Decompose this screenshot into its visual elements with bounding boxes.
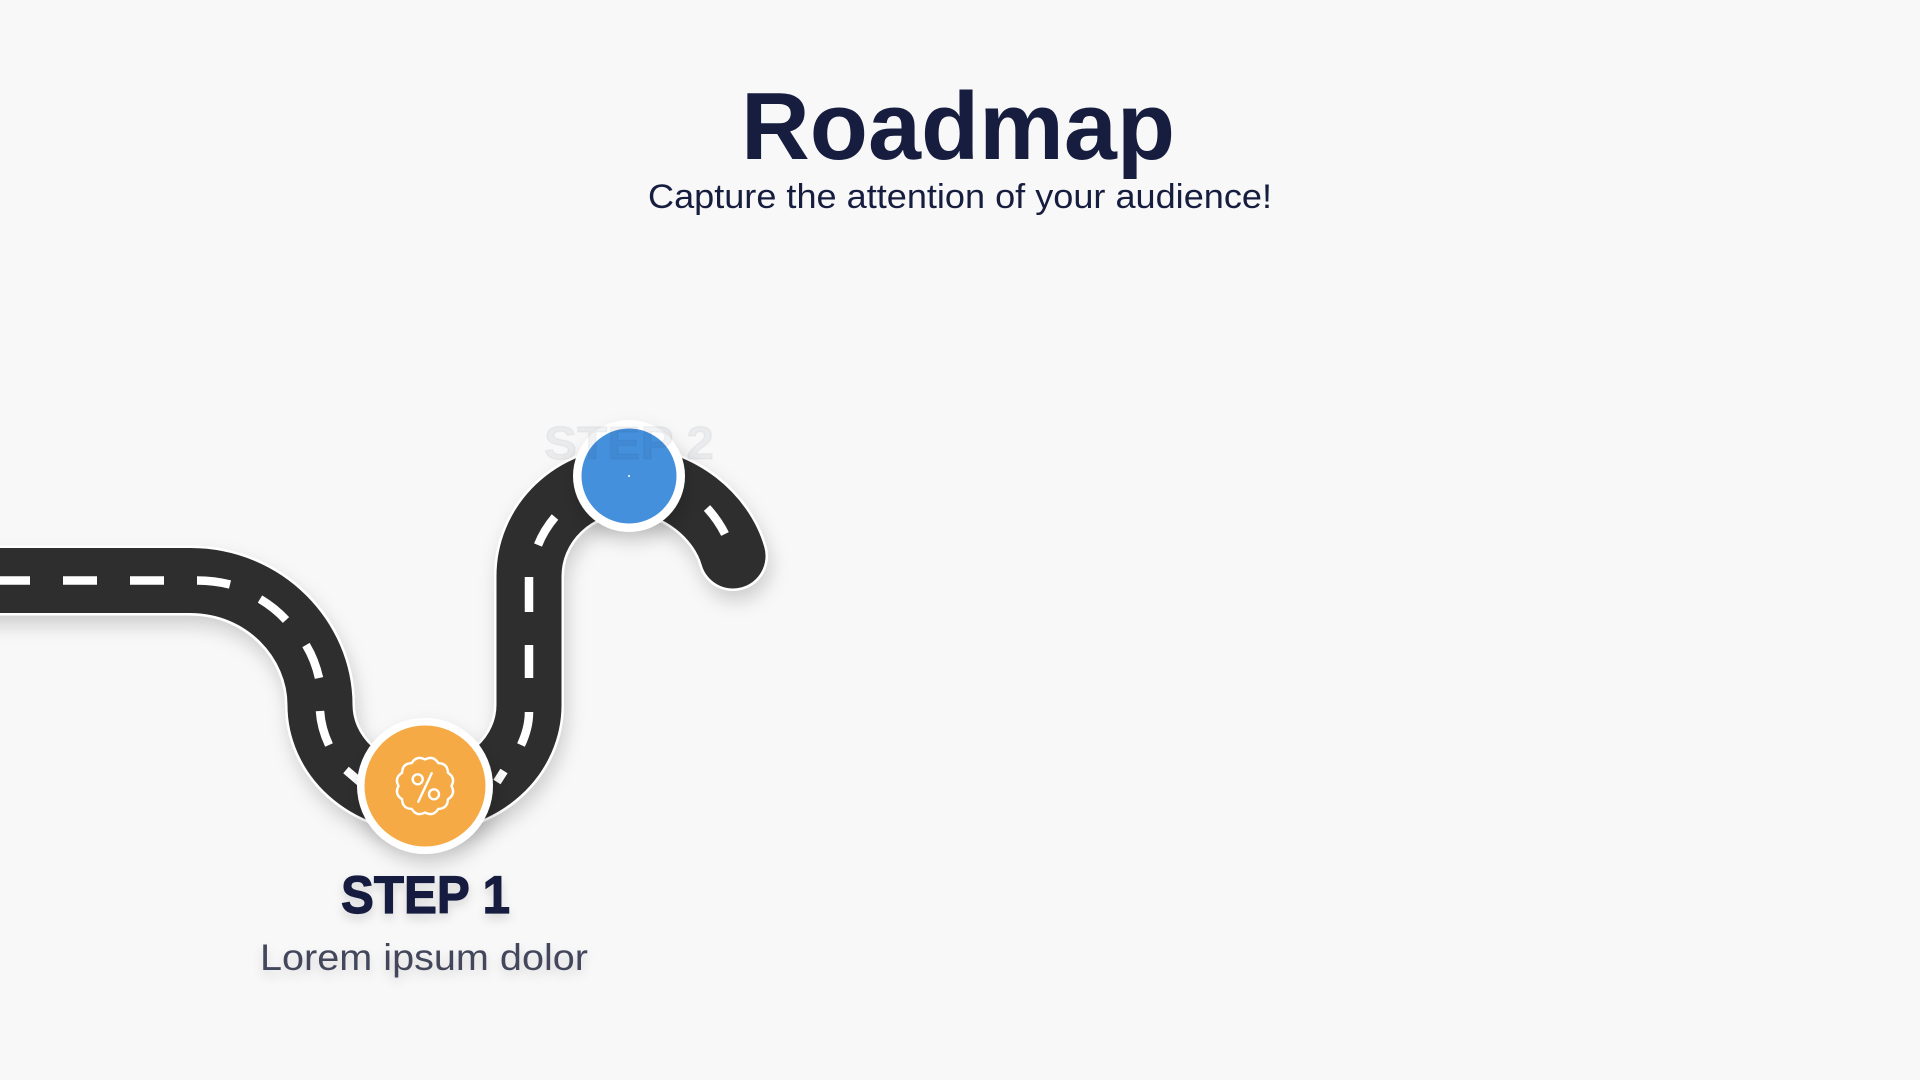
subtitle: Capture the attention of your audience! — [648, 178, 1272, 216]
marker disc: blue — [573, 420, 685, 532]
road surface — [0, 480, 733, 799]
step 1 marker — [357, 718, 493, 854]
step 1 heading: STEP 1 — [341, 866, 510, 925]
step 1 description: Lorem ipsum dolor — [260, 937, 588, 978]
step 2 heading, fading in: STEP 2 — [544, 417, 714, 469]
road centre dashes — [0, 508, 725, 782]
icon: percent badge — [397, 758, 453, 814]
road — [0, 480, 733, 799]
step 2 marker — [573, 420, 685, 532]
icon: tiny start dot — [628, 475, 630, 477]
title: Roadmap — [741, 73, 1175, 180]
marker disc: orange — [357, 718, 493, 854]
